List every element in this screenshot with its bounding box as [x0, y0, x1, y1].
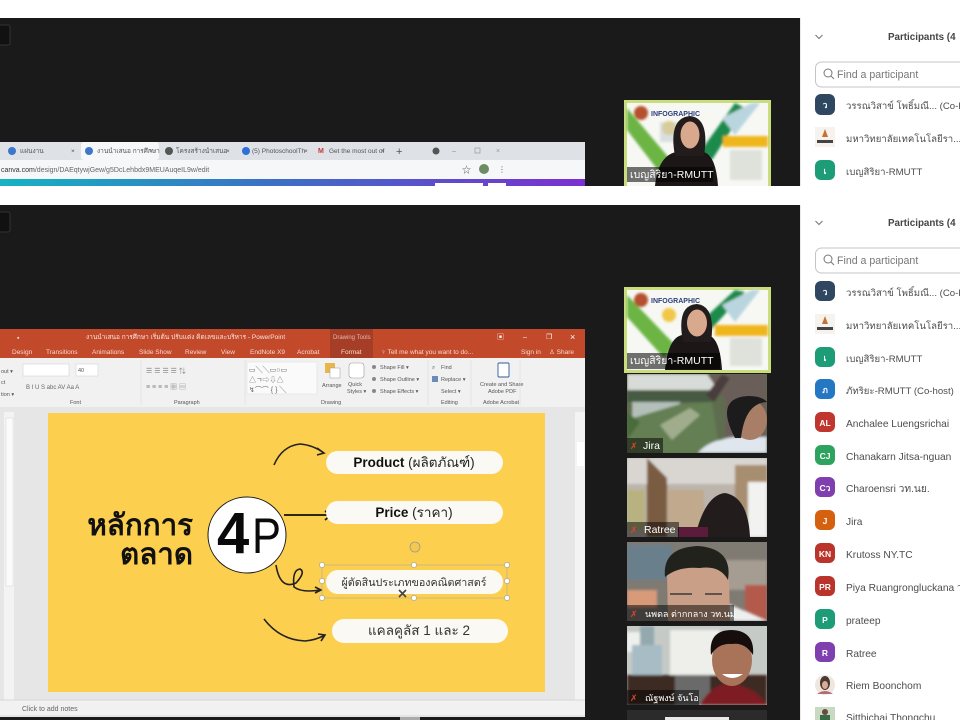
name label	[627, 522, 679, 537]
title bar: Acrobat	[297, 349, 320, 356]
participant row: Cว	[820, 483, 831, 493]
pill: decision item with selection box	[319, 542, 510, 601]
browser window: Canva tabs: ×	[381, 148, 385, 155]
ribbon: Drawing	[321, 400, 341, 406]
participant row: Piya Ruangrongluckana ว	[846, 583, 960, 594]
presenter tile, lower meeting	[624, 287, 771, 373]
ribbon: tion ▾	[1, 392, 14, 398]
name label: ✗	[630, 609, 638, 619]
ribbon: ↯⌒⌒ { } ╲	[249, 385, 286, 394]
browser window: Canva tabs: งานนำเสนอ การศึกษา	[97, 147, 160, 155]
name label: ✗	[630, 525, 638, 535]
name label: Jira	[643, 440, 660, 452]
search box	[816, 62, 960, 87]
participant row	[815, 127, 960, 147]
arrow: to Calculus	[264, 619, 325, 641]
browser window: Canva tabs: ⋮	[498, 165, 506, 174]
participants panel, lower meeting: Participants (4	[888, 218, 956, 229]
participant row: Jira	[846, 517, 863, 528]
ribbon: Arrange	[322, 383, 342, 389]
participant row	[815, 347, 922, 367]
ribbon: Shape Outline ▾	[380, 377, 419, 383]
title bar	[0, 329, 585, 358]
participant row	[815, 576, 960, 596]
browser window: Canva tabs: แผ่นงาน	[20, 148, 44, 155]
participant row: ว	[823, 287, 828, 297]
name label: นพดล ต่ากกลาง วท.นม	[645, 609, 736, 619]
ribbon: ⌕	[432, 365, 435, 371]
ribbon: ≡ ≡ ≡ ≡ ▦ ▤	[146, 383, 186, 391]
heading	[87, 509, 193, 571]
ribbon: Paragraph	[174, 400, 200, 406]
video tile: Ratree	[627, 458, 767, 537]
participant row: AL	[819, 418, 831, 428]
participant row: ภัทริยะ-RMUTT (Co-host)	[846, 386, 954, 397]
4P circle	[208, 497, 286, 573]
title bar: Drawing Tools	[333, 335, 371, 341]
name label: ✗	[630, 693, 638, 703]
participants panel, lower meeting	[800, 205, 960, 720]
name label: เบญสิริยา-RMUTT	[630, 355, 714, 367]
browser window: Canva tabs: canva.com/design/DAEqtywjGew/g5DcLehbdx9MEUAuqeIL9w/edit	[1, 167, 209, 174]
pill: Price: Price (ราคา)	[375, 505, 453, 520]
top meeting video area	[0, 18, 800, 186]
participant row	[815, 314, 960, 334]
arrow: to Price	[284, 511, 331, 520]
participants panel, top meeting	[800, 0, 960, 186]
heading: ตลาด	[120, 538, 193, 571]
participant row: CJ	[820, 451, 831, 461]
title bar: Animations	[92, 349, 125, 356]
participant row	[815, 510, 863, 530]
participant row	[815, 642, 877, 662]
participant row: เบญสิริยา-RMUTT	[846, 167, 922, 178]
ribbon	[0, 358, 585, 407]
slide workspace	[0, 407, 585, 700]
pill: Price	[326, 501, 503, 524]
participant row: Riem Boonchom	[846, 681, 921, 692]
name label	[627, 690, 699, 705]
participant row: P	[822, 615, 828, 625]
participant row: เ	[824, 353, 827, 363]
ribbon: B I U S abc AV Aa A	[26, 385, 79, 391]
title bar: Transitions	[46, 349, 78, 356]
participant row	[815, 543, 913, 563]
browser window: Canva tabs: (5) PhotoschoolTh	[252, 148, 305, 155]
browser window: Canva tabs: –	[452, 148, 456, 155]
ribbon: ct	[1, 380, 6, 386]
title bar: ▣	[497, 333, 504, 341]
browser window: Canva tabs: ×	[71, 148, 75, 155]
participant row: Anchalee Luengsrichai	[846, 419, 949, 430]
video tile: fourth participant	[627, 626, 767, 705]
pill: Calculus	[332, 619, 508, 643]
participant row	[815, 281, 960, 301]
4P circle: 4	[217, 501, 249, 566]
name label: ✗	[630, 441, 638, 451]
participant row: เ	[824, 166, 827, 176]
participants panel, top meeting: Participants (4	[888, 32, 956, 43]
PowerPoint window	[0, 329, 585, 720]
participant row: Chanakarn Jitsa-nguan	[846, 452, 951, 463]
presenter tile, top meeting: INFOGRAPHIC	[651, 111, 700, 118]
browser window: Canva tabs	[0, 142, 585, 186]
participant row: เบญสิริยา-RMUTT	[846, 354, 922, 365]
title bar: Sign in	[521, 349, 541, 356]
title bar: ♙ Share	[549, 349, 574, 356]
browser window: Canva tabs: ×	[226, 148, 230, 155]
video tile: Jira	[627, 374, 767, 453]
browser window: Canva tabs: ×	[304, 148, 308, 155]
slide: 4P marketing	[48, 413, 545, 692]
name label: ณัฐพงษ์ จันโอ	[645, 692, 699, 704]
ribbon: 40	[78, 368, 84, 374]
browser window: Canva tabs: Get the most out of	[329, 148, 384, 155]
title bar: Review	[185, 349, 207, 356]
ribbon: out ▾	[1, 369, 13, 375]
title bar: View	[221, 349, 235, 356]
browser window: Canva tabs: โครงสร้างนำเสนอ	[176, 147, 228, 155]
search box: Find a participant	[837, 69, 918, 81]
ribbon: Adobe PDF	[488, 389, 517, 395]
name label	[627, 353, 720, 369]
participant row	[815, 675, 921, 695]
arrow: to third item	[276, 565, 321, 593]
participant row	[815, 379, 954, 399]
pill: Product: Product (ผลิตภัณฑ์)	[353, 454, 475, 470]
participant row: Charoensri วท.นย.	[846, 484, 930, 495]
pill: Product	[326, 451, 503, 474]
ribbon: △ㄱ⇨⇩△	[249, 375, 283, 384]
title bar: ▪	[17, 335, 20, 342]
participant row	[815, 445, 951, 465]
heading: หลักการ	[87, 509, 193, 542]
participant row: prateep	[846, 616, 881, 627]
ribbon: Styles ▾	[347, 389, 367, 395]
title bar: ×	[570, 332, 575, 342]
title bar: Slide Show	[139, 349, 172, 356]
name label	[627, 438, 663, 453]
video tile: partial next participant	[627, 710, 767, 720]
ribbon: Replace ▾	[441, 377, 466, 383]
arrow: to Product	[274, 444, 324, 465]
pill: decision item with selection box: ผู้ตัดสินประเภทของคณิตศาสตร์	[342, 576, 487, 589]
name label: Ratree	[644, 524, 676, 536]
ribbon: Shape Effects ▾	[380, 389, 419, 395]
participant row: R	[822, 648, 828, 658]
name label	[627, 605, 736, 621]
ribbon: Select ▾	[441, 389, 461, 395]
notes bar	[0, 700, 585, 720]
ribbon: Editing	[441, 400, 458, 406]
video tile: third participant	[627, 542, 767, 621]
participant row: ว	[823, 100, 828, 110]
notes bar: Click to add notes	[22, 706, 78, 713]
participant row: PR	[819, 582, 831, 592]
browser window: Canva tabs: M	[318, 148, 324, 155]
ribbon: Create and Share	[480, 382, 523, 388]
ribbon: Font	[70, 400, 81, 406]
participant row	[815, 707, 935, 720]
ribbon: ▭╲╲▭○▭	[249, 365, 287, 374]
browser window: Canva tabs: +	[396, 146, 402, 158]
participant row: J	[823, 516, 828, 526]
title bar: งานนำเสนอ การศึกษา เริ่มต้น ปรับแต่ง คิดเลขและบริหาร - PowerPoint	[86, 332, 285, 341]
participant row: KN	[819, 549, 831, 559]
title bar: ❐	[546, 333, 552, 341]
name label: เบญสิริยา-RMUTT	[630, 169, 714, 181]
browser window: Canva tabs: ×	[496, 148, 500, 155]
title bar: Design	[12, 349, 33, 356]
participant row: ภ	[822, 385, 828, 395]
search box: Find a participant	[837, 255, 918, 267]
presenter tile, lower meeting: INFOGRAPHIC	[651, 298, 700, 305]
ribbon: Quick	[348, 382, 362, 388]
participant row	[815, 94, 960, 115]
ribbon: Shape Fill ▾	[380, 365, 409, 371]
4P circle: P	[252, 508, 281, 564]
presenter tile, top meeting	[624, 100, 771, 186]
participant row	[815, 412, 949, 432]
pill: Calculus: แคลคูลัส 1 และ 2	[368, 623, 470, 639]
browser window: Canva tabs: ×	[149, 148, 153, 155]
lower meeting video area	[0, 205, 800, 720]
ribbon: Find	[441, 365, 452, 371]
title bar: EndNote X9	[250, 349, 285, 356]
panel edge shadows	[800, 18, 802, 720]
title bar: ♀ Tell me what you want to do...	[381, 349, 473, 356]
title bar: –	[523, 334, 527, 341]
title bar: Format	[341, 349, 362, 356]
ribbon: Adobe Acrobat	[483, 400, 520, 406]
participant row	[815, 160, 922, 180]
participant row	[815, 609, 881, 629]
participant row	[815, 477, 930, 497]
search box	[816, 248, 960, 273]
browser window: Canva tabs: ☆	[462, 165, 471, 175]
participant row: Krutoss NY.TC	[846, 550, 913, 561]
ribbon: ☰ ☰ ☰ ☰ ⇅	[146, 367, 186, 375]
participant row: Ratree	[846, 649, 877, 660]
